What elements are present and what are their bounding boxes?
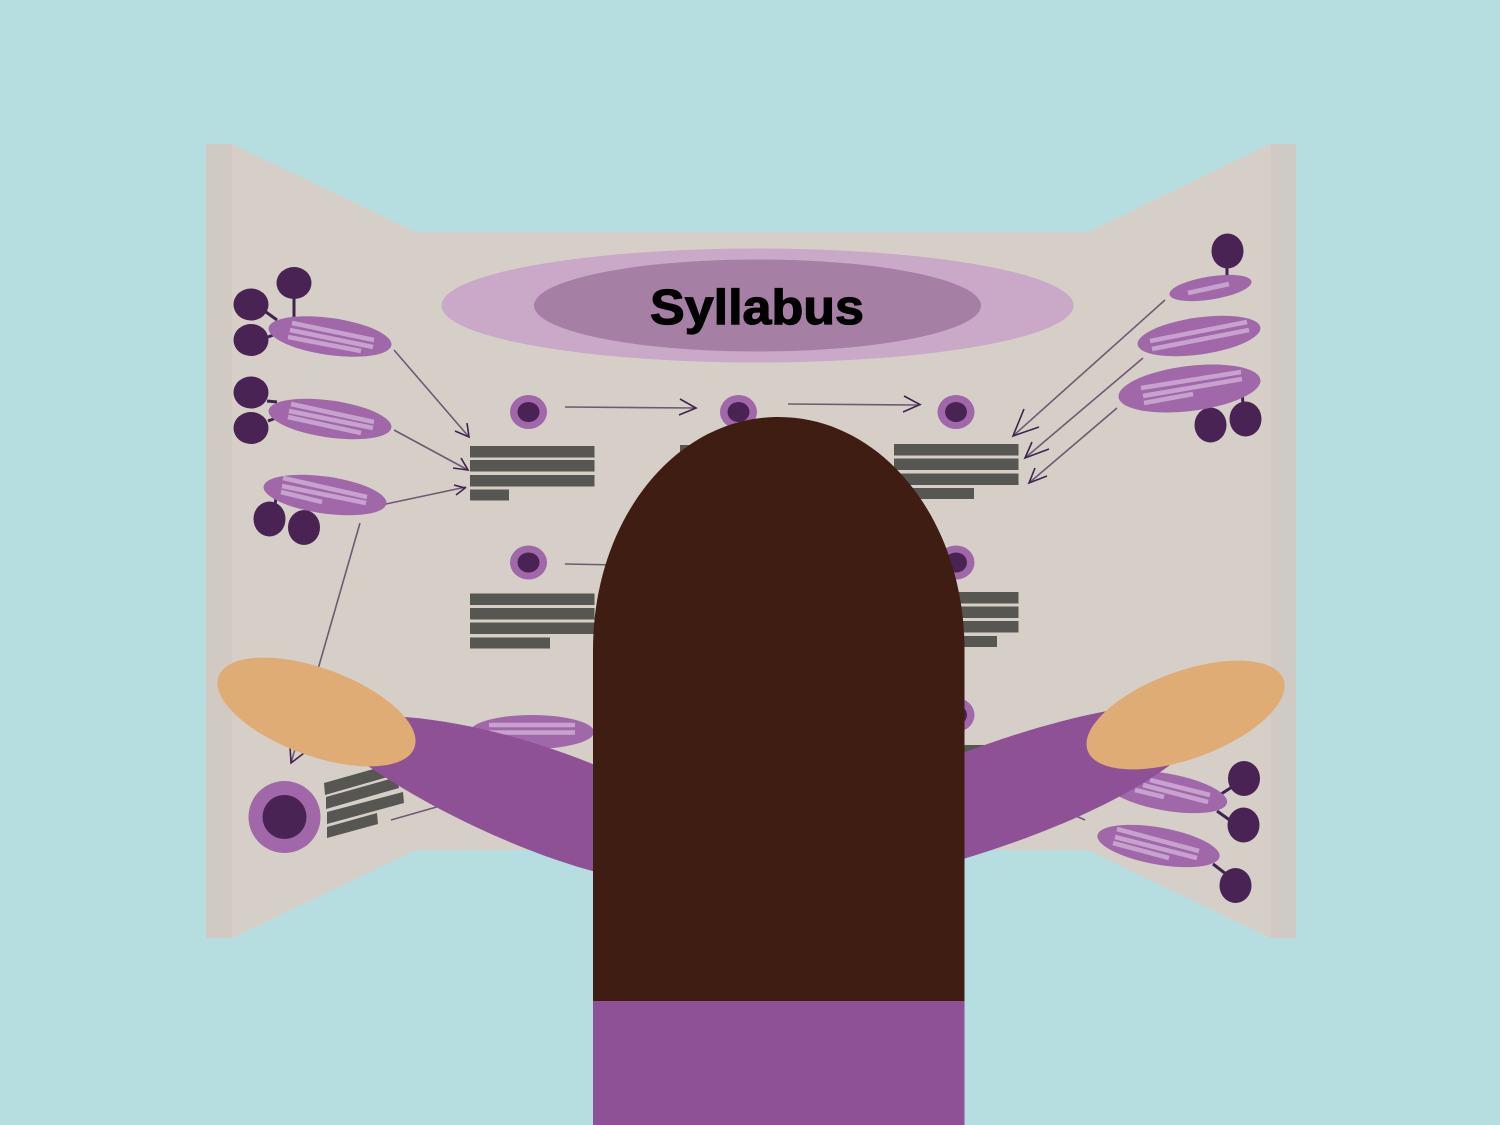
text block row 2 left bbox=[470, 594, 594, 648]
left concept cluster 2 bbox=[234, 376, 394, 446]
right arm bbox=[960, 711, 1170, 860]
node row 2 right bbox=[938, 546, 974, 580]
right arrow 2 bbox=[1025, 358, 1143, 458]
middle arrow stub bbox=[565, 564, 620, 565]
left arrow 3 bbox=[386, 485, 466, 504]
top arrow 2 bbox=[788, 396, 920, 412]
left concept cluster 1 bbox=[234, 267, 394, 363]
right concept cluster 2 bbox=[1135, 309, 1263, 363]
right hand bbox=[1073, 638, 1298, 792]
left arm bbox=[368, 717, 600, 873]
lower right concept cluster 1 bbox=[1102, 761, 1260, 842]
title inner ellipse bbox=[534, 260, 981, 352]
lower left node bbox=[248, 781, 320, 853]
text block row 1 left bbox=[470, 446, 594, 500]
left concept cluster 3 bbox=[254, 468, 389, 545]
hair bbox=[593, 417, 964, 1001]
right concept cluster 1 bbox=[1168, 234, 1253, 306]
lower right arrow stub bbox=[1076, 816, 1085, 820]
right arrow 3 bbox=[1029, 408, 1117, 483]
node row 3 right bbox=[938, 698, 974, 732]
top arrow 1 bbox=[565, 399, 696, 415]
text block row 2 right bbox=[894, 592, 1018, 647]
node row 2 left bbox=[510, 546, 547, 580]
lower center concept bbox=[470, 715, 594, 749]
title: Syllabus bbox=[442, 248, 1074, 362]
right arrow 1 bbox=[1013, 300, 1165, 436]
left hand bbox=[204, 635, 429, 789]
left long arrow bbox=[290, 523, 360, 763]
node row 1 center bbox=[720, 395, 757, 429]
lower right concept cluster 2 bbox=[1094, 817, 1252, 903]
right concept cluster 3 bbox=[1116, 357, 1263, 442]
lower left text block bbox=[324, 763, 404, 838]
text block row 3 right bbox=[940, 745, 1000, 756]
node row 1 left bbox=[510, 395, 547, 429]
right fold edge bbox=[1271, 144, 1296, 938]
title text: Syllabus bbox=[650, 281, 864, 335]
board panels bbox=[206, 144, 1296, 938]
shirt bbox=[593, 1001, 964, 1125]
text block row 1 right bbox=[894, 444, 1018, 499]
title outer ellipse bbox=[442, 248, 1074, 362]
text block row 1 center bbox=[680, 445, 804, 456]
tri-fold syllabus board bbox=[206, 144, 1296, 938]
left arrow 1 bbox=[394, 350, 469, 437]
left fold edge bbox=[206, 144, 232, 938]
left arrow 2 bbox=[394, 430, 468, 470]
lower left arrow stub bbox=[391, 806, 440, 820]
node row 1 right bbox=[938, 395, 974, 429]
